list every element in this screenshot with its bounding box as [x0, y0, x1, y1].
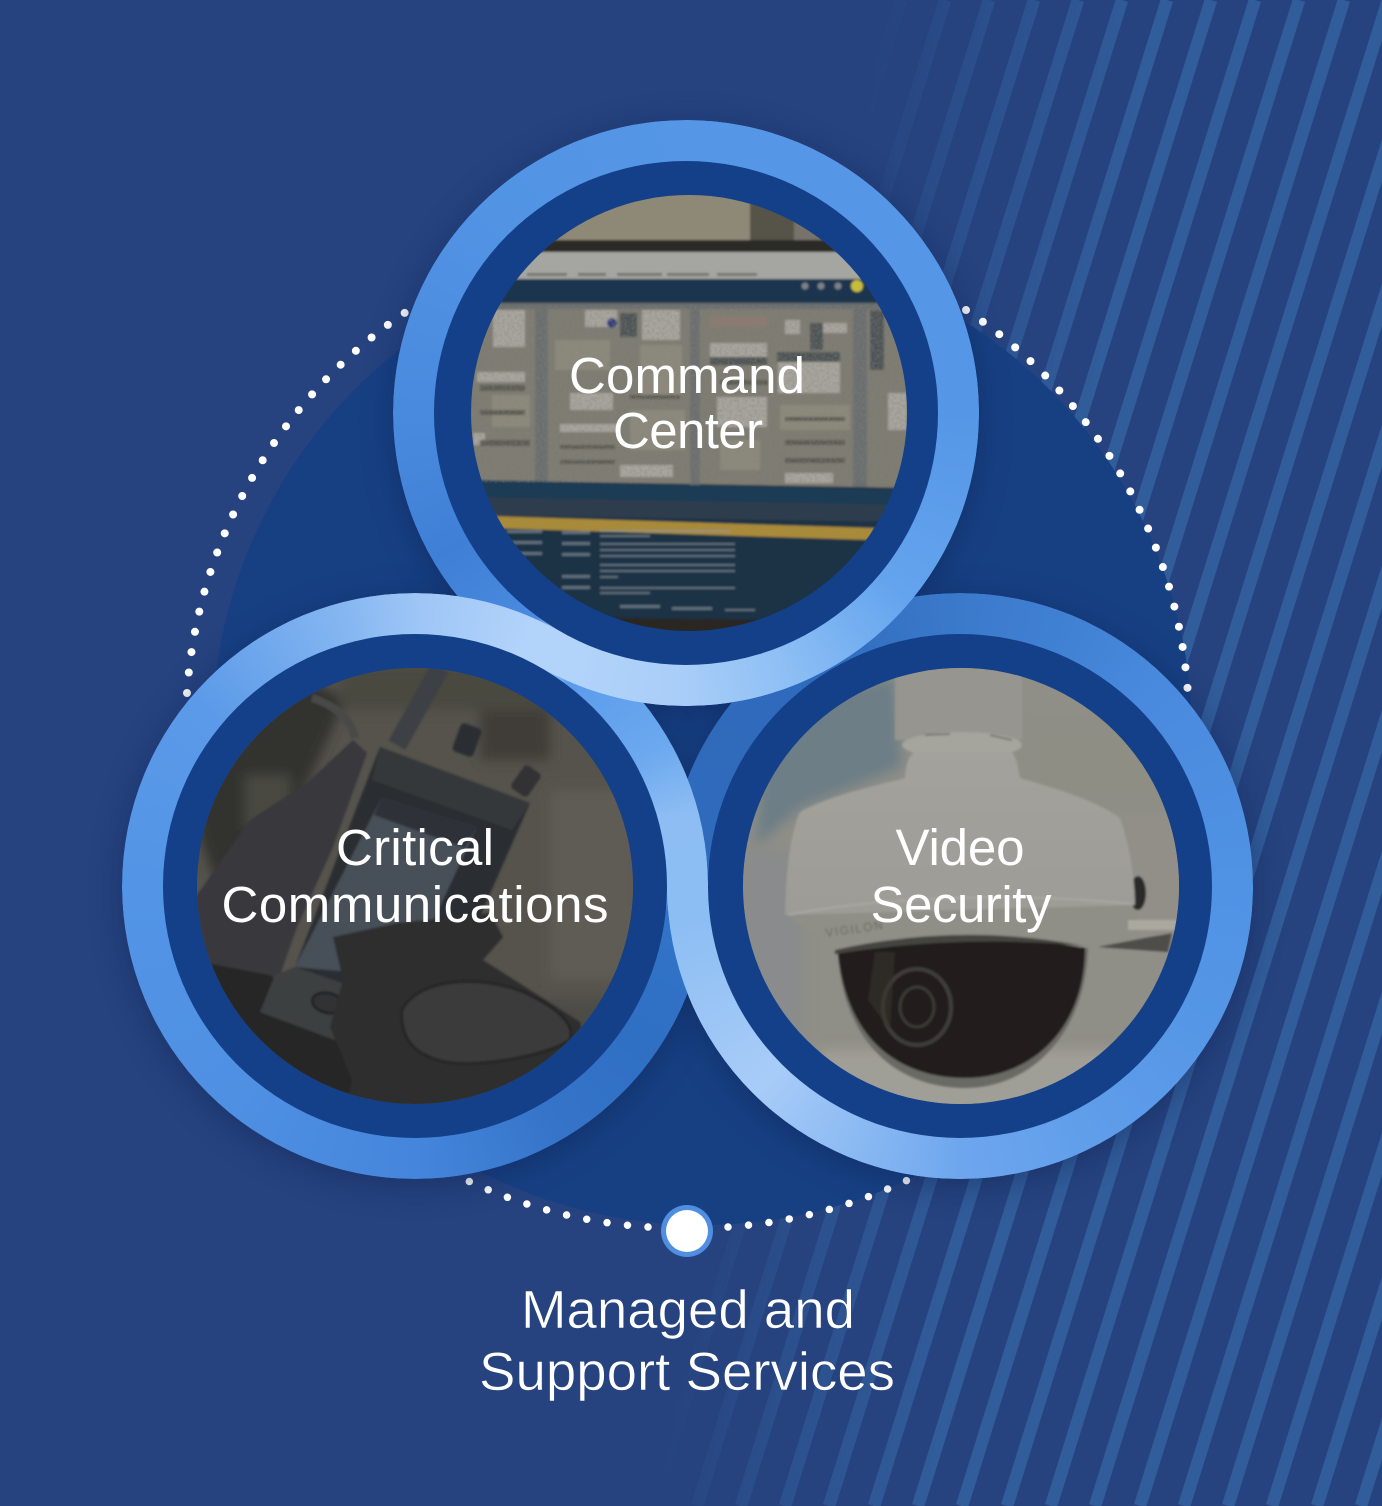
bullet marker: managed and support services: [661, 1205, 713, 1257]
label: Command Center: Center: [613, 402, 763, 459]
photo: gloved hand holding radio: [190, 660, 640, 1110]
label: Video Security: Security: [870, 876, 1052, 933]
photo: dome security camera: VIGILON: [824, 918, 885, 940]
label: Managed and Support Services: Managed and: [521, 1280, 855, 1340]
label: Managed and Support Services: [479, 1280, 895, 1402]
panel: video security: [708, 634, 1212, 1138]
label: Critical Communications: Communications: [222, 876, 608, 933]
label: Managed and Support Services: Support Services: [479, 1342, 895, 1402]
photo: dome security camera: [735, 660, 1185, 1120]
background diagonal stripes: [736, 0, 1382, 1506]
panel: command center: [434, 161, 938, 665]
label: Command Center: Command: [569, 347, 805, 404]
outer ring: video security: [667, 593, 1253, 1179]
label: Video Security: Video: [896, 819, 1024, 876]
label: Critical Communications: Critical: [336, 819, 494, 876]
outer ring: critical communications: [122, 593, 708, 1179]
outer ring: command center: [393, 120, 979, 706]
photo: monitor showing map: [470, 190, 914, 640]
circular panels: [163, 161, 1212, 1401]
dark circular backdrop: [212, 245, 1192, 1225]
panel: critical communications: [163, 634, 667, 1138]
